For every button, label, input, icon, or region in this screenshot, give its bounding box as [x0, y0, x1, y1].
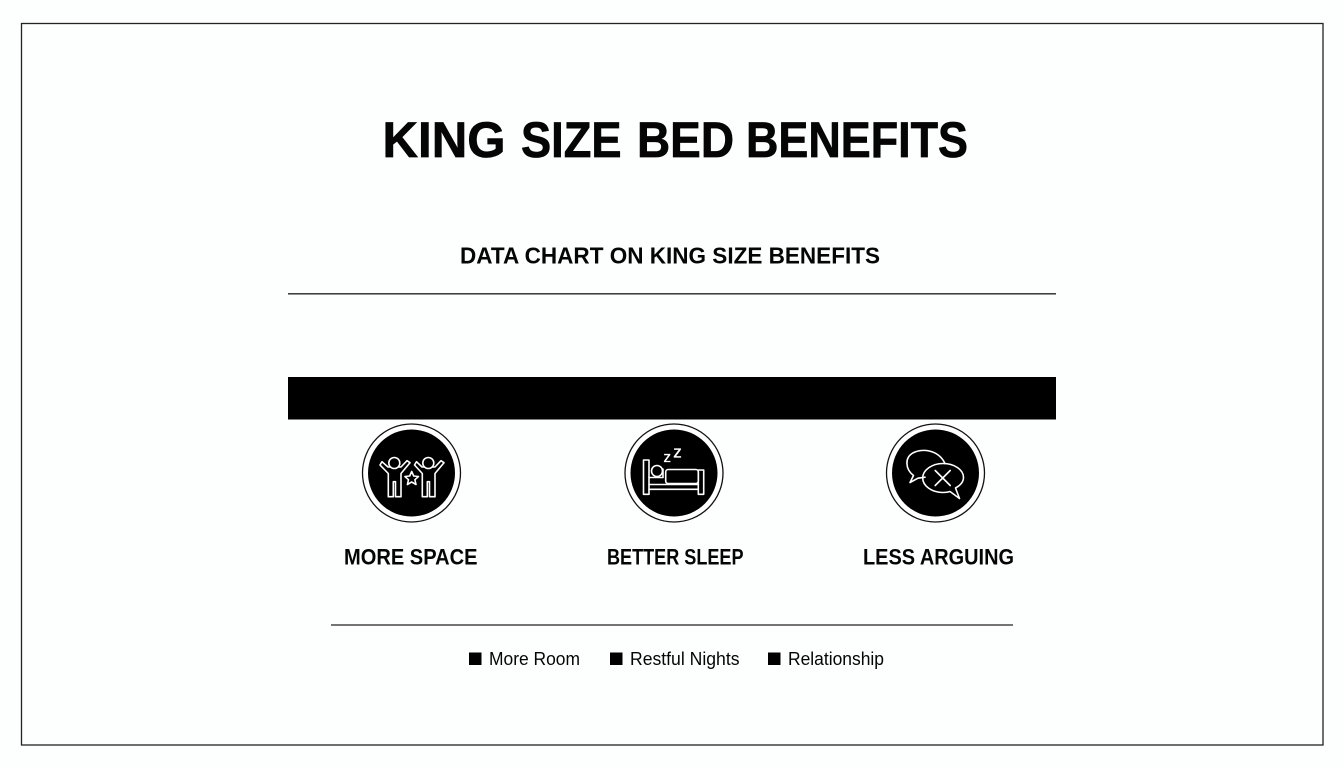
legend	[469, 649, 884, 669]
legend item: relationship: Relationship	[788, 649, 884, 669]
benefit: less arguing	[863, 424, 1014, 570]
label: better sleep: BETTER SLEEP	[607, 544, 744, 570]
legend item: restful nights: Restful Nights	[630, 649, 740, 669]
title: BENEFITS	[746, 112, 968, 168]
title	[382, 112, 968, 168]
legend item: more room: More Room	[489, 649, 580, 669]
title: BED	[637, 112, 734, 168]
label: more space: MORE SPACE	[344, 544, 478, 570]
icon: speech bubbles with cross	[886, 424, 984, 522]
title: SIZE	[521, 112, 622, 168]
benefit: better sleep	[607, 424, 744, 570]
icon: person sleeping in bed: z	[664, 449, 671, 466]
icon: person sleeping in bed	[625, 424, 723, 522]
black chart bar	[288, 377, 1056, 420]
title: KING	[382, 112, 506, 168]
label: less arguing: LESS ARGUING	[863, 544, 1014, 570]
icon: two people with star	[362, 424, 460, 522]
benefit: more space	[344, 424, 478, 570]
subtitle: DATA CHART ON KING SIZE BENEFITS	[460, 242, 880, 268]
icon: person sleeping in bed: z	[673, 442, 682, 462]
